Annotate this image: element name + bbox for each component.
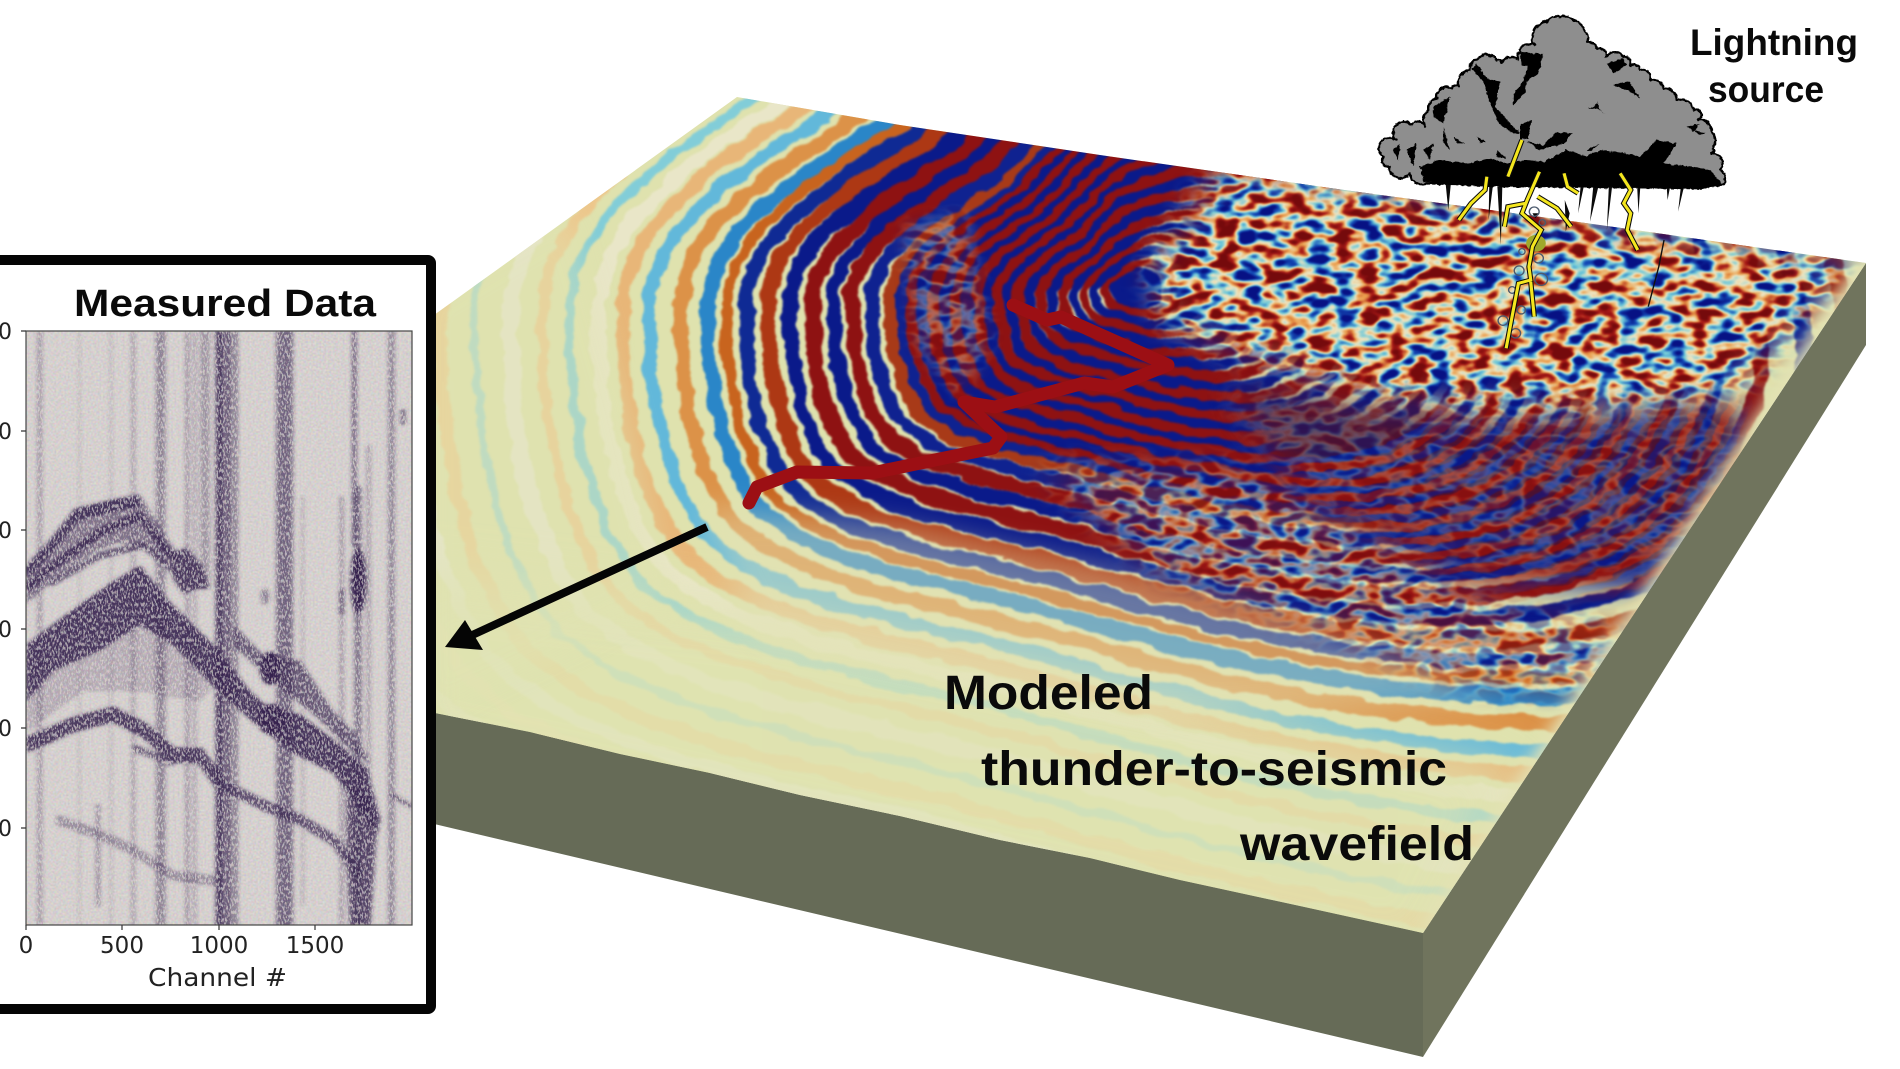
axis ticks — [21, 331, 315, 930]
dense fine arcs lower right — [1234, 376, 1756, 610]
spray rings — [1498, 207, 1548, 338]
measured data plot — [26, 331, 412, 928]
distant thin strike — [1648, 240, 1664, 307]
scattered noise over lower rings — [1034, 450, 1629, 710]
modeled wavefield label: Modeled — [944, 667, 1153, 720]
fade of rings toward the left edge — [436, 226, 668, 628]
right face of block — [1423, 263, 1866, 1057]
noise texture on dense lower right arcs — [1222, 382, 1743, 582]
y axis labels — [0, 320, 12, 842]
cloud rain and bolts — [1445, 182, 1685, 338]
arrow: from cable end to measured data — [445, 527, 707, 650]
panel frame — [0, 260, 431, 1009]
panel: measured data — [0, 260, 431, 1009]
modeled wavefield label: thunder-to-seismic — [981, 743, 1447, 796]
rain streaks — [1445, 182, 1685, 245]
x axis labels: 1500 — [286, 933, 344, 959]
panel title: Measured Data — [74, 283, 377, 325]
x axis title: Channel # — [148, 963, 287, 992]
x axis labels: 0 — [19, 933, 33, 959]
fade of rings toward the front edge — [436, 573, 1525, 933]
speckled scattering noise (right side) — [1132, 169, 1865, 426]
modeled wavefield label — [944, 667, 1474, 871]
lightning source label: Lightning — [1690, 22, 1858, 63]
pale back rim of surface — [737, 93, 1866, 259]
3D block: wavefield model — [436, 97, 1866, 1057]
modeled wavefield label: wavefield — [1239, 818, 1474, 871]
lightning outline — [1459, 140, 1638, 348]
cloud body — [1379, 16, 1725, 189]
x axis labels — [19, 933, 344, 959]
lightning source label: source — [1708, 69, 1824, 110]
lightning source label — [1690, 22, 1858, 110]
partial fade over mid lower rings — [700, 505, 1500, 720]
speckled band between rings — [896, 208, 998, 396]
front face of block — [430, 704, 1423, 1057]
plot border — [26, 331, 412, 925]
concentric wave rings — [436, 98, 1848, 928]
icon: storm cloud with lightning — [1379, 16, 1725, 348]
x axis labels: 1000 — [190, 933, 248, 959]
top surface: modeled wavefield — [436, 97, 1866, 933]
lightning bolts — [1459, 140, 1638, 348]
lightning core — [1459, 140, 1638, 348]
impact glow — [1526, 235, 1546, 252]
x axis labels: 500 — [100, 933, 144, 959]
fibre optic cable (red line) — [749, 305, 1168, 503]
pale right rim of surface — [1433, 265, 1876, 938]
